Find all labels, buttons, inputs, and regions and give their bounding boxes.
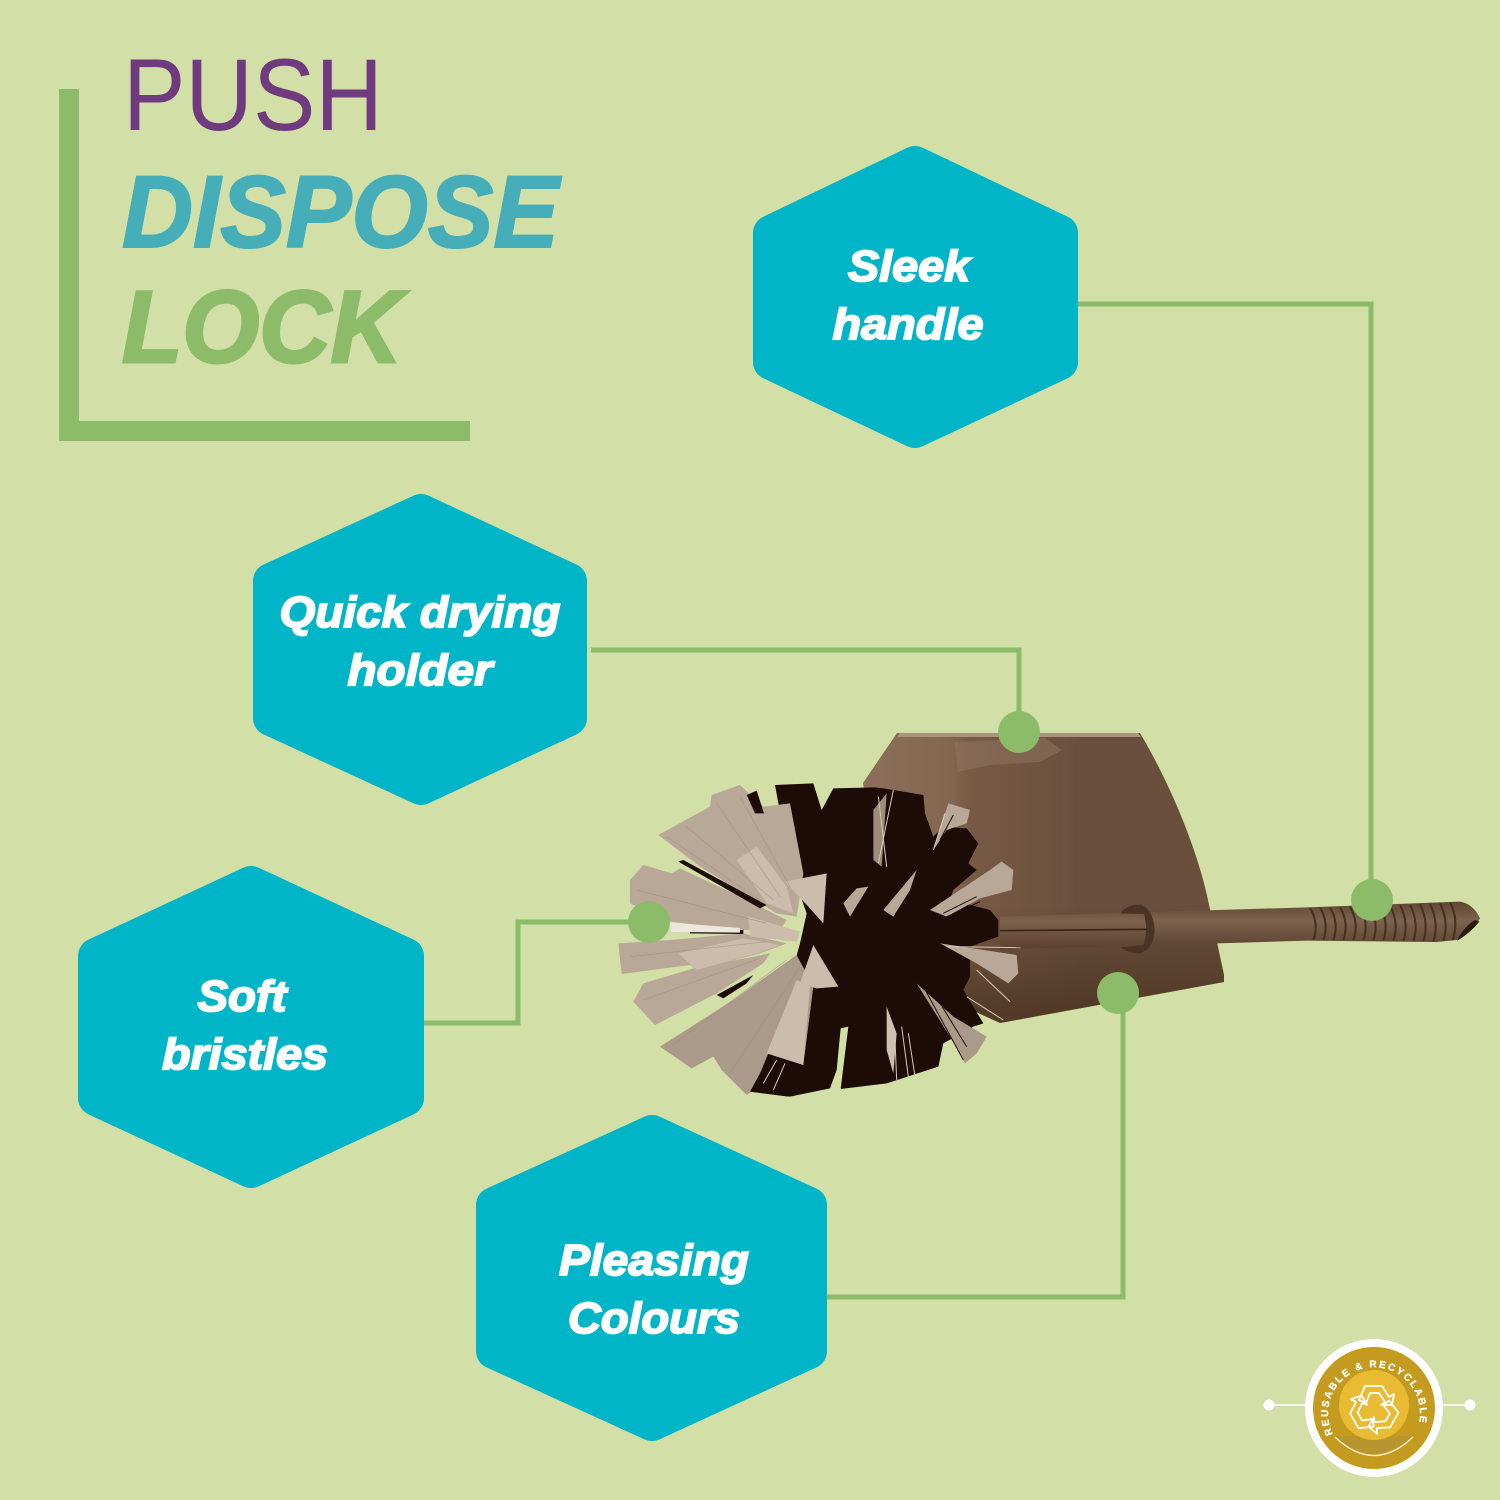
connector: quick drying holder (591, 650, 1019, 732)
dark gaps between tufts (678, 791, 795, 1097)
handle collar (1120, 905, 1155, 953)
light bristle tufts (618, 785, 1018, 1095)
badge: reusable and recyclable (1264, 1339, 1476, 1477)
brush handle (1000, 902, 1480, 953)
brush head (618, 783, 1021, 1097)
title bracket (59, 89, 470, 441)
metal stem glint (671, 923, 740, 933)
badge side connectors (1264, 1400, 1475, 1410)
marker dot: handle (1351, 879, 1393, 921)
lighter tufts in centre (678, 847, 838, 1065)
title word: PUSH: PUSH (123, 38, 383, 152)
connector: sleek handle (1078, 304, 1371, 900)
title block (59, 38, 562, 441)
hexagon: soft bristles: bristles (162, 1030, 328, 1079)
product photo: holder and brush (618, 733, 1480, 1097)
hexagon: soft bristles (96, 884, 406, 1170)
title word: DISPOSE: DISPOSE (122, 155, 562, 269)
hexagon: pleasing colours (494, 1133, 809, 1423)
icon: recycling arrows (1344, 1386, 1401, 1438)
bristle strands (763, 790, 1021, 1090)
connector: soft bristles (424, 922, 650, 1023)
dark bristles (750, 783, 998, 1097)
hexagon: sleek handle (771, 164, 1060, 430)
hexagon: sleek handle: handle (832, 300, 984, 349)
hexagon: quick drying holder: holder (348, 646, 496, 695)
connector: pleasing colours (827, 993, 1123, 1297)
handle grip ribs (1310, 903, 1455, 942)
marker dot: bristles (628, 901, 670, 943)
hexagon: sleek handle: Sleek (848, 242, 973, 291)
hexagon: quick drying holder (271, 512, 569, 787)
badge curved text: REUSABLE & RECYCLABLE (1320, 1360, 1428, 1436)
holder (863, 733, 1224, 1023)
marker dot: colours (1097, 972, 1139, 1014)
hexagon: pleasing colours: Pleasing (559, 1236, 749, 1285)
marker dot: holder (998, 711, 1040, 753)
hexagon: quick drying holder: Quick drying (280, 588, 561, 637)
hexagon: soft bristles: Soft (198, 972, 289, 1021)
title word: LOCK: LOCK (122, 270, 408, 384)
hexagon: pleasing colours: Colours (568, 1294, 740, 1343)
